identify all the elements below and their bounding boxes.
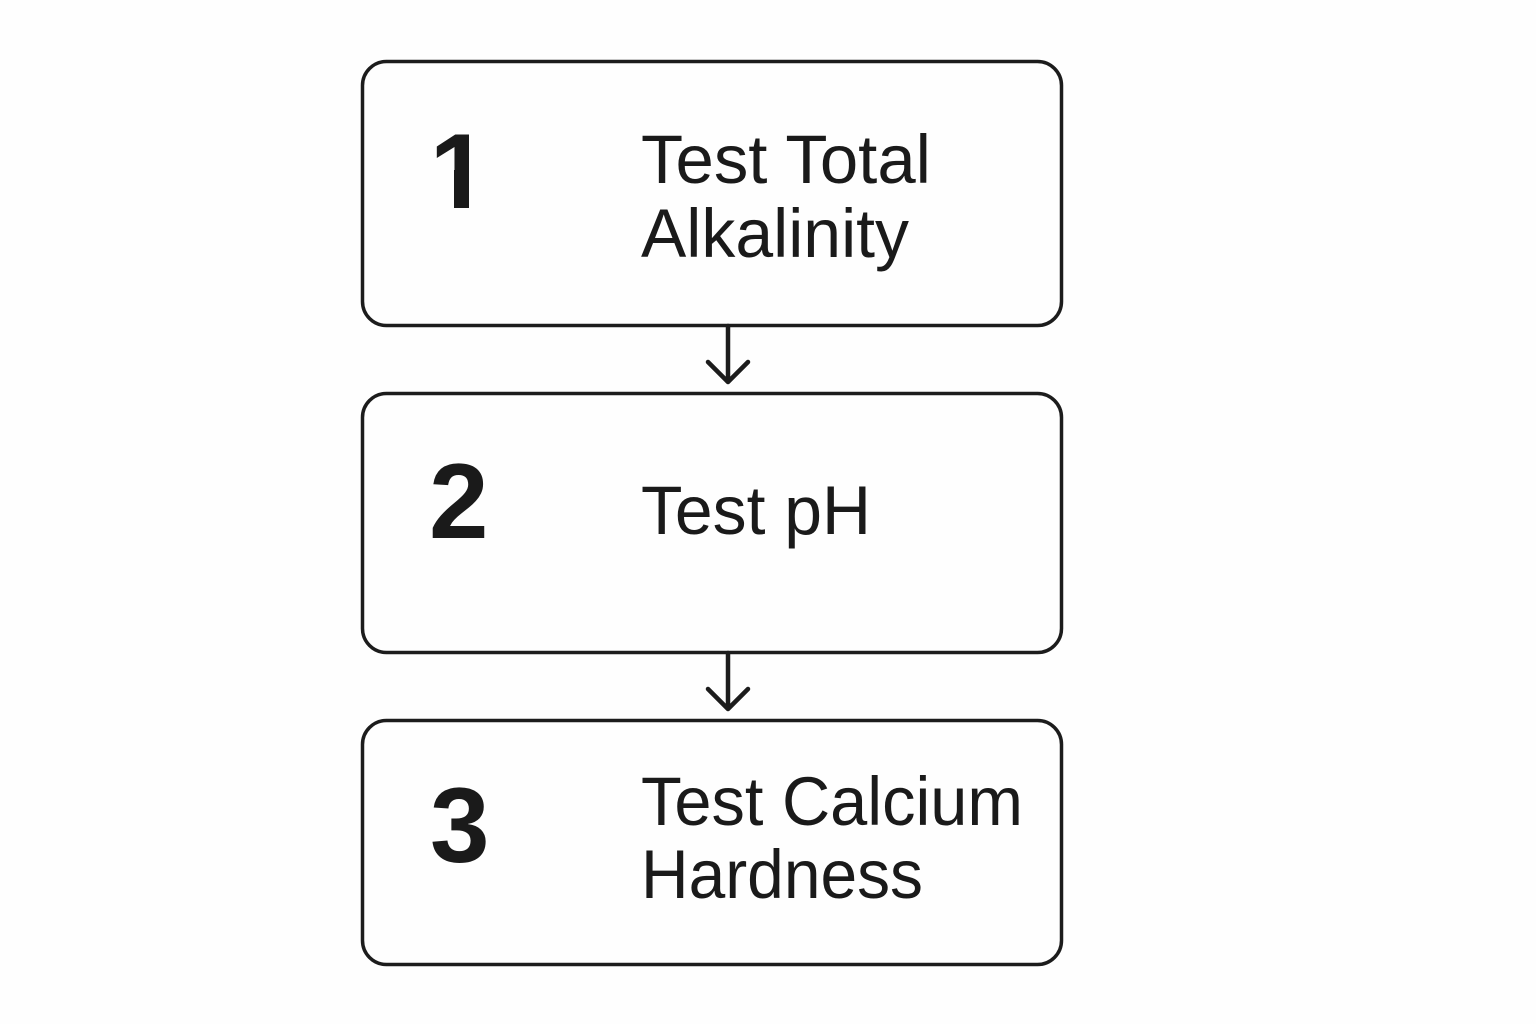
label: Test Total Alkalinity: [641, 121, 931, 272]
label: Test Calcium Hardness: [641, 763, 1023, 913]
arrow: step 2 to 3: [708, 653, 748, 709]
panel: step 3: [362, 720, 1062, 964]
panel: step 1: [362, 62, 1062, 326]
flowchart: [360, 60, 1064, 966]
arrow: step 1 to 2: [708, 326, 748, 382]
number 1: [436, 134, 469, 208]
number 1: 1: [430, 111, 489, 231]
number 3: 3: [430, 765, 490, 885]
number 2: 2: [429, 441, 489, 561]
label: Test Calcium Hardness: Test Calcium: [641, 763, 1023, 840]
panel: step 2: [362, 394, 1062, 652]
label: Test pH: Test pH: [641, 472, 871, 549]
label: Test Total Alkalinity: Alkalinity: [641, 195, 909, 272]
label: Test Calcium Hardness: Hardness: [641, 836, 923, 913]
label: Test Total Alkalinity: Test Total: [641, 121, 931, 198]
